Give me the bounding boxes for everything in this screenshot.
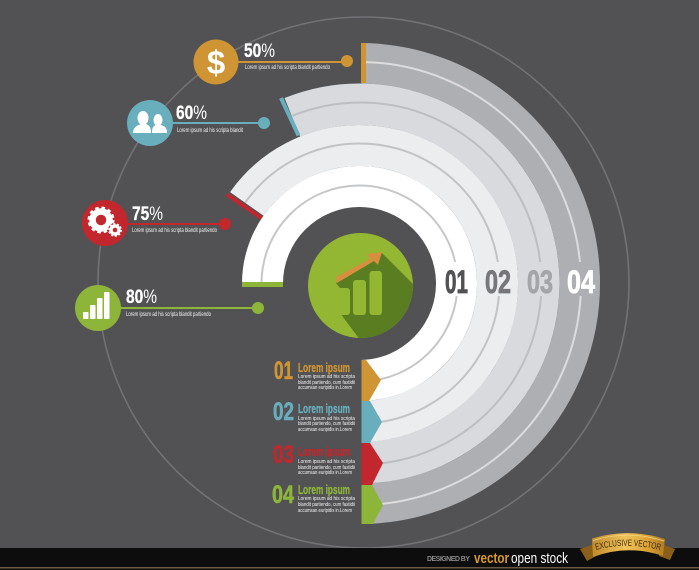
legend 04: blandit partiendo, cum fastidii — [298, 502, 355, 508]
legend 02 — [273, 398, 356, 433]
legend arrows — [362, 360, 383, 524]
legend 01: Lorem ipsum ad his scripta — [298, 374, 356, 380]
ring 02 (75%) — [227, 144, 499, 423]
legend 02: blandit partiendo, cum fastidii — [298, 421, 355, 427]
ring numbers: 02 — [485, 264, 511, 300]
legend 03: Lorem ipsum — [298, 444, 350, 459]
item: 50%: 50% — [244, 41, 275, 62]
icon: gears — [89, 208, 122, 237]
item: 80%: 80% — [126, 287, 157, 308]
legend 03: 03 — [273, 441, 294, 469]
legend 01: blandit partiendo, cum fastidii — [298, 380, 355, 386]
item: 80%: Lorem ipsum ad his scripta blandit partiendo — [126, 312, 211, 318]
badge: exclusive vector — [580, 533, 675, 561]
ring 01 (80%) — [242, 186, 458, 381]
outer orbit circle — [98, 17, 629, 548]
footer bar — [0, 548, 699, 570]
legend 02: 02 — [273, 398, 294, 426]
legend 04: 04 — [272, 481, 294, 509]
icon: bars — [83, 292, 110, 319]
central growth icon — [308, 233, 413, 338]
item: 75%: 75% — [132, 204, 163, 225]
item: 75% — [82, 200, 231, 246]
legend 04: Lorem ipsum — [298, 482, 350, 497]
legend 04 — [272, 481, 356, 514]
legend 04: Lorem ipsum ad his scripta — [298, 496, 356, 502]
icon: people — [133, 111, 167, 133]
icon: dollar: $ — [207, 44, 225, 81]
item: 60% — [127, 100, 270, 146]
legend 01: 01 — [274, 357, 293, 385]
item: 60%: Lorem ipsum ad his scripta blandit — [177, 128, 243, 134]
footer bar: vector — [474, 550, 509, 567]
ring 04 (50%) — [361, 43, 581, 505]
legend 02: accumsan euripidis in.Lorem — [298, 427, 352, 433]
item: 50% — [194, 40, 353, 84]
ring numbers — [445, 262, 595, 300]
item: 75%: Lorem ipsum ad his scripta blandit partiendo — [132, 228, 217, 234]
legend 03: accumsan euripidis in.Lorem — [298, 470, 352, 476]
legend 03: blandit partiendo, cum fastidii — [298, 465, 355, 471]
legend 03: Lorem ipsum ad his scripta — [298, 459, 356, 465]
item: 60%: 60% — [176, 103, 207, 124]
legend 01: accumsan euripidis in.Lorem — [298, 385, 352, 391]
footer bar: DESIGNED BY — [427, 556, 470, 563]
ring numbers: 04 — [567, 264, 595, 300]
ring numbers: 03 — [527, 264, 553, 300]
legend 02: Lorem ipsum — [298, 401, 350, 416]
ring numbers: 01 — [445, 264, 468, 300]
item: 50%: Lorem ipsum ad his scripta blandit partiendo — [245, 65, 330, 71]
badge: exclusive vector: EXCLUSIVE VECTOR — [595, 540, 661, 550]
legend 01 — [274, 357, 356, 391]
item: 80% — [75, 285, 264, 331]
footer bar: open stock — [511, 550, 568, 567]
legend 03 — [273, 441, 356, 476]
ring 03 (60%) — [281, 98, 541, 464]
legend 04: accumsan euripidis in.Lorem — [298, 508, 352, 514]
legend 01: Lorem ipsum — [298, 360, 350, 375]
legend 02: Lorem ipsum ad his scripta — [298, 416, 356, 422]
